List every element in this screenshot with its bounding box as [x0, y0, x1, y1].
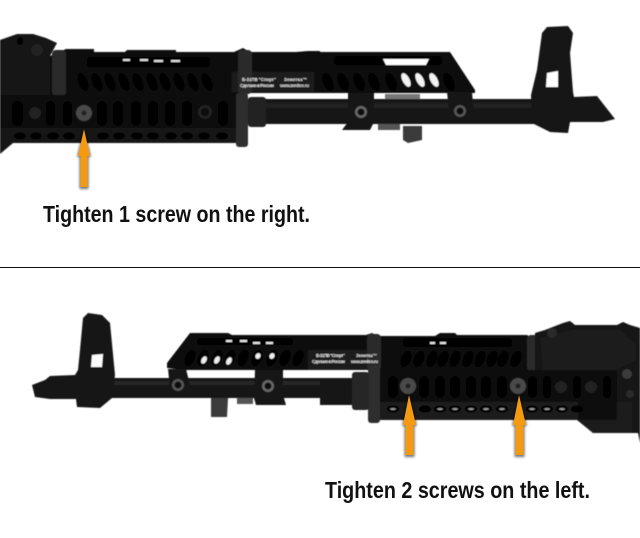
lower handguard: [0, 95, 238, 143]
upper long slots: [87, 57, 210, 67]
front sight: [32, 313, 115, 408]
engraved text: www.zenitco.ru: [279, 83, 309, 88]
upper handguard: [167, 333, 540, 372]
bipod stud: [403, 126, 422, 143]
arrow: left screw 2: [512, 393, 527, 457]
receiver and stock: [378, 321, 640, 443]
divider line: [0, 267, 640, 268]
lower vertical slots: [387, 376, 611, 412]
photo: rifle right side: [0, 26, 615, 154]
arrow: left screw 1: [402, 393, 417, 457]
engraved text: Б-31ПВ "Спорт": [242, 77, 276, 82]
photo: rifle left side: [32, 313, 640, 443]
upper long slots: [197, 338, 293, 345]
lower vertical slots: [12, 101, 228, 140]
bolts: [29, 107, 41, 119]
engraved text: Сделано в России: [240, 83, 274, 88]
caption: right: Tighten 1 screw on the right.: [43, 201, 310, 227]
engraved text: [240, 77, 309, 88]
upper slanted slots: [75, 71, 457, 93]
arrow: right screw: [77, 127, 91, 189]
engraved text: www.zenitco.ru: [350, 359, 378, 364]
screw: [76, 105, 92, 121]
engraved text: [312, 353, 378, 364]
engraved text: Б-31ПВ "Спорт": [316, 353, 345, 358]
caption: left: Tighten 2 screws on the left.: [325, 477, 590, 503]
barrel: [245, 99, 543, 124]
upper slanted slots: [182, 348, 524, 369]
clamps: [168, 369, 190, 396]
engraved text: Сделано в России: [312, 359, 345, 364]
engraved text: Зенитка™: [284, 77, 307, 82]
stock block: [0, 95, 20, 154]
lower handguard: [378, 370, 617, 420]
bipod stud: [211, 398, 228, 417]
engraved text: Зенитка™: [356, 353, 377, 358]
front sight: [531, 26, 615, 133]
barrel: [105, 378, 370, 398]
upper handguard: [50, 48, 475, 97]
receiver: [0, 34, 57, 96]
screws: [400, 378, 416, 394]
clamps: [342, 93, 374, 130]
bolts: [555, 381, 567, 393]
